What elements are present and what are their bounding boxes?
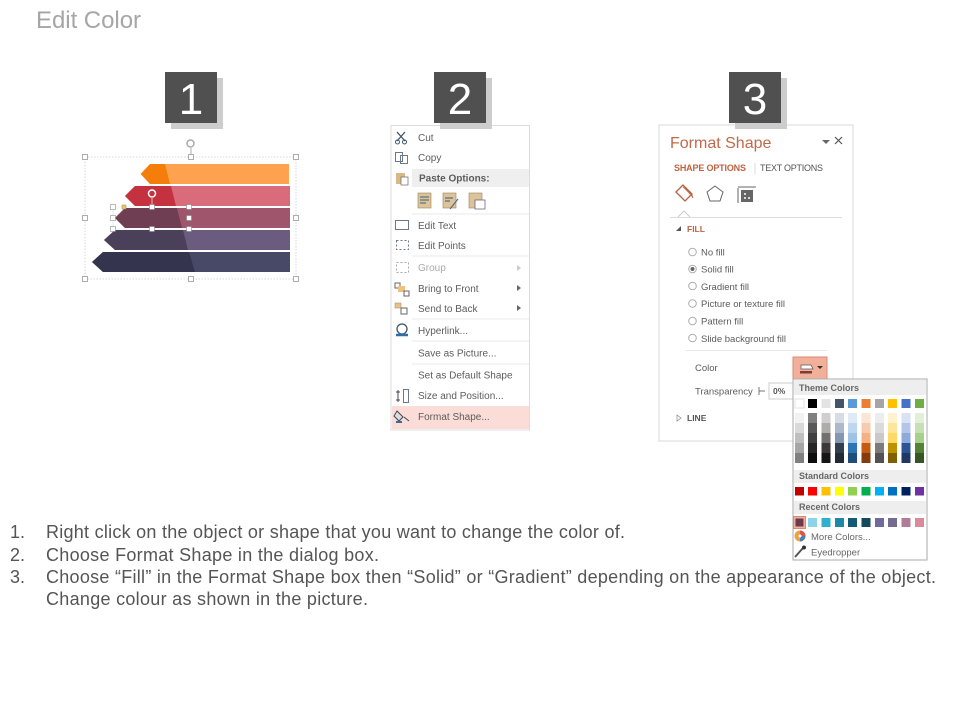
submenu arrows [517,265,521,311]
menu labels: Paste Options: [419,174,490,184]
menu labels: Save as Picture... [418,348,496,360]
line section: LINE [687,413,707,423]
step 3 badge [729,72,787,129]
theme color shades [795,413,924,463]
line section [677,413,707,423]
menu labels: Size and Position... [418,391,504,402]
menu labels: Format Shape... [418,412,490,423]
menu labels [418,133,513,423]
recent colors [794,516,924,528]
instructions list [10,522,936,609]
menu labels: Copy [418,153,441,164]
fill section: Picture or texture fill [701,299,785,310]
more colors row: More Colors... [811,532,871,543]
fill section: Gradient fill [701,282,749,293]
menu labels: Edit Points [418,241,466,252]
panel heading: Format Shape [670,135,771,152]
fill section: Solid fill [701,264,734,276]
instructions list: Right click on the object or shape that you want to change the color of. [46,522,625,542]
fill section: Pattern fill [701,316,743,328]
menu labels: Send to Back [418,304,478,315]
dark arrow sides [92,164,195,272]
instructions list: Choose “Fill” in the Format Shape box then “Solid” or “Gradient” depending on the appearance of the object. [46,567,936,587]
instructions list: Change colour as shown in the picture. [46,589,368,609]
title: Edit Color [36,7,141,34]
step 2 badge: 2 [448,75,472,124]
panel tabs [674,163,823,174]
fill section: FILL [687,224,705,234]
instructions list: 3. [10,567,25,587]
selection frame [85,157,296,279]
inner handles [110,190,192,232]
menu labels: Hyperlink... [418,326,468,337]
instructions list: 1. [10,522,25,542]
transparency row [695,383,794,399]
menu labels: Cut [418,133,434,144]
format shape panel [659,125,853,441]
step 1 badge: 1 [179,75,203,124]
menu labels: Group [418,263,446,274]
fill section [676,224,786,345]
color picker popup: Recent Colors [799,502,860,512]
standard colors [795,487,924,496]
transparency row: 0% [773,386,786,396]
menu labels: Edit Text [418,221,456,232]
step 1 badge [165,72,223,129]
menu labels: Bring to Front [418,284,479,295]
panel tabs: SHAPE OPTIONS [674,163,746,173]
color picker popup: Standard Colors [799,471,869,481]
color row: Color [695,363,718,374]
menu icons [394,132,485,422]
fill section: No fill [701,248,725,258]
panel icons [676,185,756,203]
menu labels: Set as Default Shape [418,370,513,382]
more colors row [794,530,871,543]
fill section: Slide background fill [701,334,786,345]
context menu [391,126,530,430]
panel controls [822,137,842,144]
step 2 badge [434,72,492,129]
outer handles [82,140,298,282]
light arrows [92,164,290,272]
color row [695,357,827,379]
arrow stack with selection handles [82,140,298,282]
color picker popup: Theme Colors [799,383,859,393]
transparency row: Transparency [695,386,753,398]
instructions list: Choose Format Shape in the dialog box. [46,545,379,565]
panel tabs: TEXT OPTIONS [760,163,823,173]
theme color top row [795,399,924,408]
step 3 badge: 3 [743,75,767,124]
instructions list: 2. [10,545,25,565]
eyedropper row [795,546,860,558]
color picker popup [793,379,927,560]
eyedropper row: Eyedropper [811,548,860,558]
